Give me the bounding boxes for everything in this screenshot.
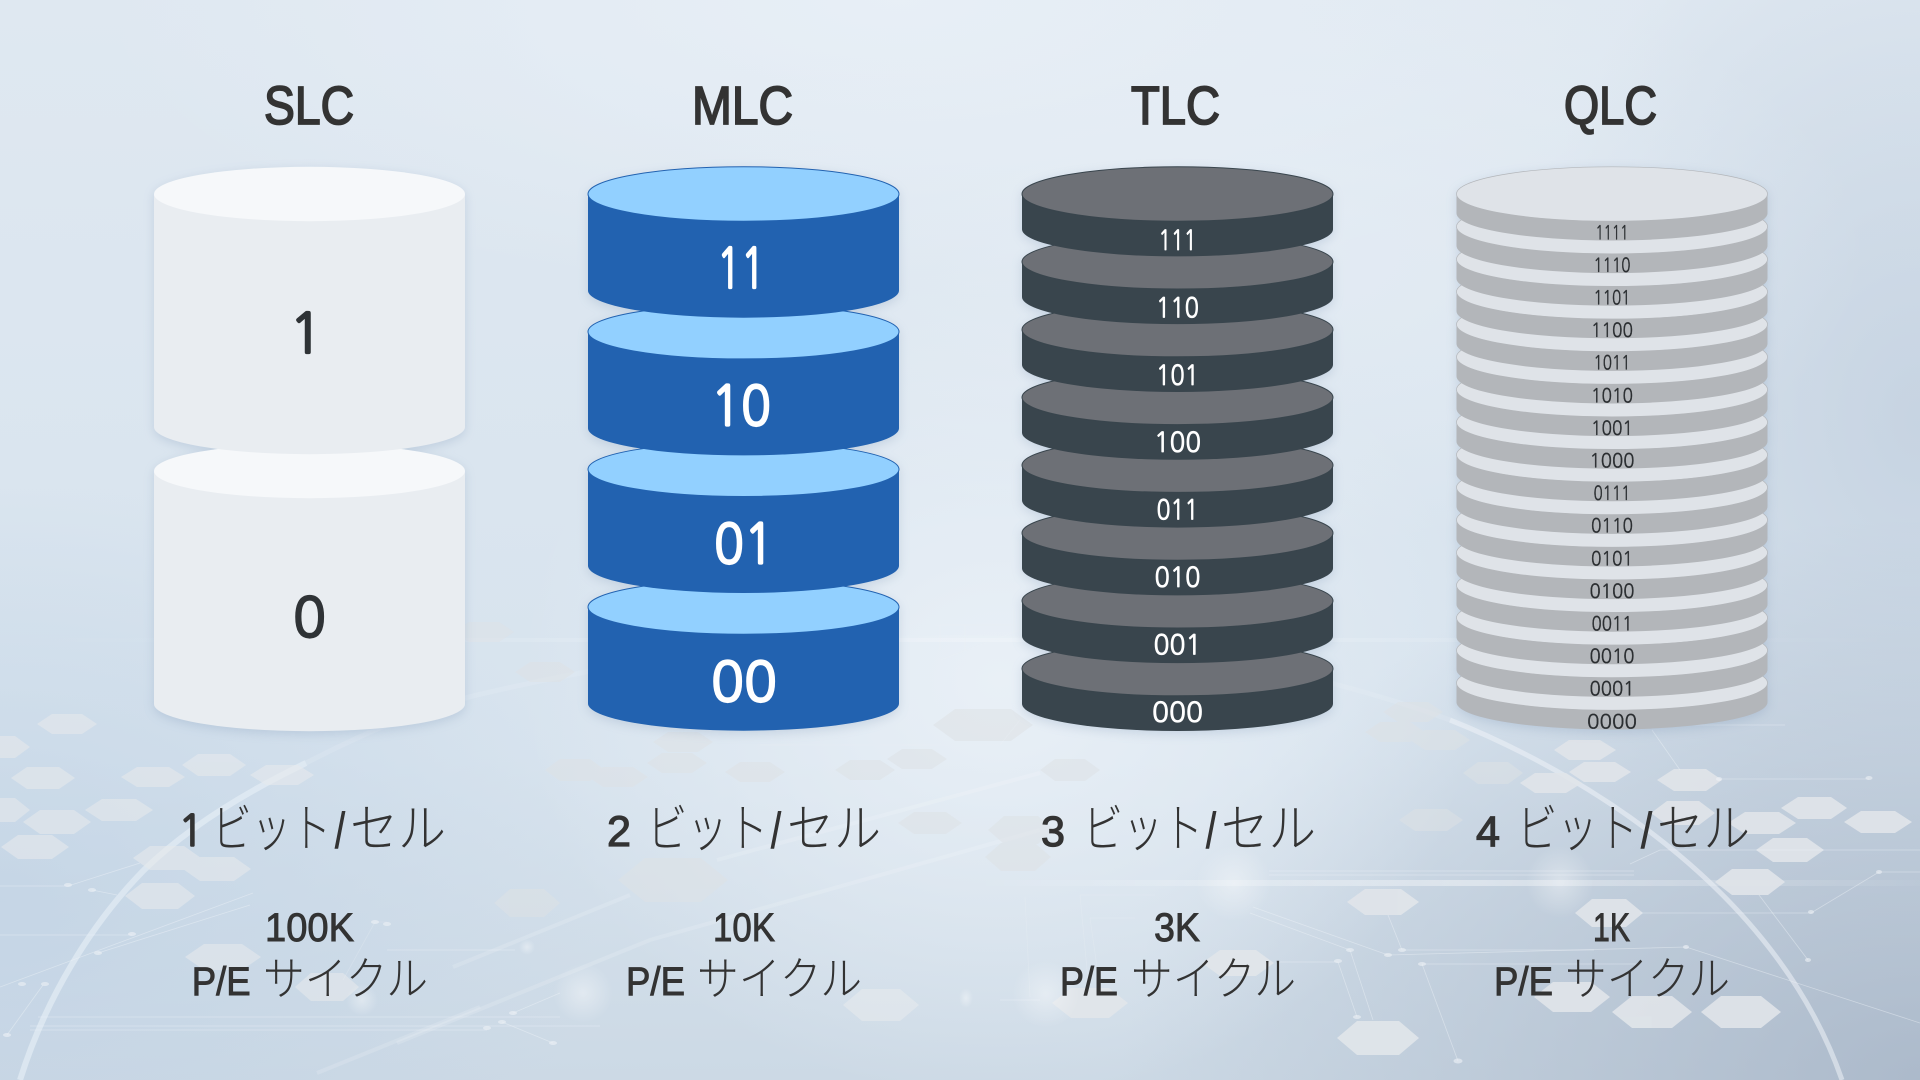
bits per cell: SLC: セル: [350, 801, 446, 859]
background decoration: left hexagons: [0, 714, 919, 1021]
disc: 0100: 0100: [1590, 581, 1634, 601]
background decoration: large globe arc: [20, 638, 1842, 1080]
disc: 0010: [1456, 591, 1768, 666]
endurance: MLC: P/E: [626, 960, 685, 1004]
disc: 0101: [1456, 493, 1768, 568]
disc: 1111: 1111: [1596, 222, 1628, 242]
disc: 110: [1022, 235, 1333, 324]
background decoration: light bands: [0, 638, 1920, 1073]
disc: 100: [1022, 370, 1333, 460]
disc: 1: [154, 167, 465, 454]
endurance: SLC: [192, 906, 428, 1005]
disc: 10: [588, 304, 899, 455]
disc: 111: 111: [1158, 227, 1196, 255]
disc: 1101: [1456, 232, 1768, 308]
disc: 1110: [1456, 199, 1768, 275]
endurance: MLC: [626, 906, 862, 1005]
disc: 1010: 1010: [1591, 385, 1633, 405]
disc: 01: 01: [714, 516, 774, 572]
disc: 1110: 1110: [1594, 255, 1630, 275]
heading: SLC: SLC: [264, 76, 354, 136]
disc: 111: [1022, 167, 1333, 256]
disc: 101: [1022, 302, 1333, 392]
disc: 1011: [1456, 297, 1768, 373]
endurance: TLC: P/E: [1060, 960, 1118, 1004]
disc: 1000: 1000: [1590, 450, 1634, 470]
bits per cell: QLC: /: [1641, 803, 1652, 859]
disc: 011: 011: [1156, 497, 1198, 525]
bits per cell: TLC: ビット: [1083, 801, 1203, 859]
bits per cell: TLC: /: [1206, 803, 1216, 859]
endurance: SLC: サイクル: [263, 953, 428, 1005]
bits per cell: SLC: /: [335, 803, 345, 859]
disc: 0011: 0011: [1592, 614, 1632, 634]
disc: 01: [588, 442, 899, 593]
background decoration: circuit lines: [0, 725, 1920, 1061]
disc: 00: [588, 580, 899, 731]
disc: 101: 101: [1156, 362, 1199, 390]
background decoration: faint hexagons: [454, 622, 1523, 917]
heading: QLC: QLC: [1564, 76, 1657, 136]
disc: 0000: [1456, 656, 1768, 731]
disc: 11: [588, 167, 899, 318]
disc: 000: 000: [1152, 699, 1203, 727]
background decoration: bright hexagons: [1052, 740, 1912, 1055]
disc: 0100: [1456, 525, 1768, 601]
disc: 000: [1022, 641, 1333, 731]
bits per cell: TLC: セル: [1221, 801, 1316, 859]
heading: MLC: MLC: [692, 76, 793, 136]
disc: 001: [1022, 574, 1333, 663]
disc: 0111: 0111: [1594, 483, 1630, 503]
bits per cell: TLC: [1041, 801, 1316, 859]
disc: 10: 10: [711, 379, 771, 434]
disc: 0111: [1456, 428, 1768, 503]
bits per cell: TLC: 3: [1041, 808, 1065, 856]
bits per cell: MLC: ビット: [647, 801, 768, 859]
disc: 0010: 0010: [1590, 646, 1634, 666]
disc: 001: 001: [1154, 631, 1202, 659]
endurance: TLC: サイクル: [1131, 953, 1296, 1005]
bits per cell: MLC: 2: [607, 808, 631, 856]
bits per cell: QLC: [1476, 801, 1750, 859]
background decoration: circuit nodes: [3, 776, 1882, 1064]
background decoration: lens glows: [346, 845, 1594, 1028]
disc: 0000: 0000: [1587, 711, 1637, 731]
bits per cell: QLC: 4: [1476, 808, 1500, 856]
disc: 1011: 1011: [1594, 353, 1630, 373]
disc: 100: 100: [1154, 429, 1201, 457]
endurance: SLC: 100K: [265, 906, 354, 950]
disc: 011: [1022, 438, 1333, 528]
disc: 010: 010: [1154, 564, 1200, 592]
endurance: QLC: 1K: [1593, 906, 1630, 950]
stack: QLC cylinders: [1456, 167, 1768, 731]
endurance: TLC: [1060, 906, 1296, 1005]
stack: MLC cylinders: [588, 167, 899, 731]
endurance: MLC: 10K: [713, 906, 775, 950]
stack: TLC cylinders: [1022, 167, 1333, 731]
disc: 1001: 1001: [1591, 418, 1633, 438]
endurance: TLC: 3K: [1154, 906, 1200, 950]
disc: 00: 00: [711, 654, 777, 710]
bits per cell: SLC: ビット: [212, 801, 331, 859]
disc: 0: 0: [293, 590, 326, 645]
bits per cell: MLC: [607, 801, 881, 859]
endurance: MLC: サイクル: [697, 953, 862, 1005]
disc: 0110: [1456, 460, 1768, 536]
disc: 0001: [1456, 623, 1768, 699]
disc: 0011: [1456, 558, 1768, 634]
bits per cell: MLC: セル: [787, 801, 881, 859]
disc: 1010: [1456, 330, 1768, 405]
disc: 1101: 1101: [1594, 288, 1630, 308]
stack: SLC cylinders: [154, 167, 465, 731]
bits per cell: QLC: ビット: [1517, 801, 1638, 859]
disc: 0: [154, 444, 465, 731]
endurance: SLC: P/E: [192, 960, 251, 1004]
bits per cell: QLC: セル: [1657, 801, 1750, 859]
bits per cell: MLC: /: [771, 803, 781, 859]
disc: 1000: [1456, 395, 1768, 470]
disc: 1111: [1456, 167, 1768, 242]
disc: 0101: 0101: [1591, 548, 1633, 568]
bits per cell: SLC: [178, 801, 446, 859]
disc: 1: 1: [289, 306, 323, 361]
panel: TLC: [1022, 76, 1333, 1005]
heading: TLC: TLC: [1131, 76, 1220, 136]
disc: 110: 110: [1156, 294, 1199, 322]
panel: SLC: [154, 76, 465, 1005]
disc: 0110: 0110: [1591, 516, 1633, 536]
disc: 1100: [1456, 265, 1768, 340]
disc: 11: 11: [717, 241, 765, 296]
bits per cell: SLC: 1: [178, 810, 204, 853]
endurance: QLC: [1494, 906, 1730, 1005]
panel: MLC: [588, 76, 899, 1005]
endurance: QLC: サイクル: [1565, 953, 1730, 1005]
disc: 010: [1022, 506, 1333, 595]
endurance: QLC: P/E: [1494, 960, 1553, 1004]
disc: 0001: 0001: [1590, 679, 1634, 699]
panel: QLC: [1456, 76, 1768, 1005]
disc: 1100: 1100: [1591, 320, 1633, 340]
background decoration: faint circuit lines: [343, 625, 1155, 997]
disc: 1001: [1456, 362, 1768, 438]
